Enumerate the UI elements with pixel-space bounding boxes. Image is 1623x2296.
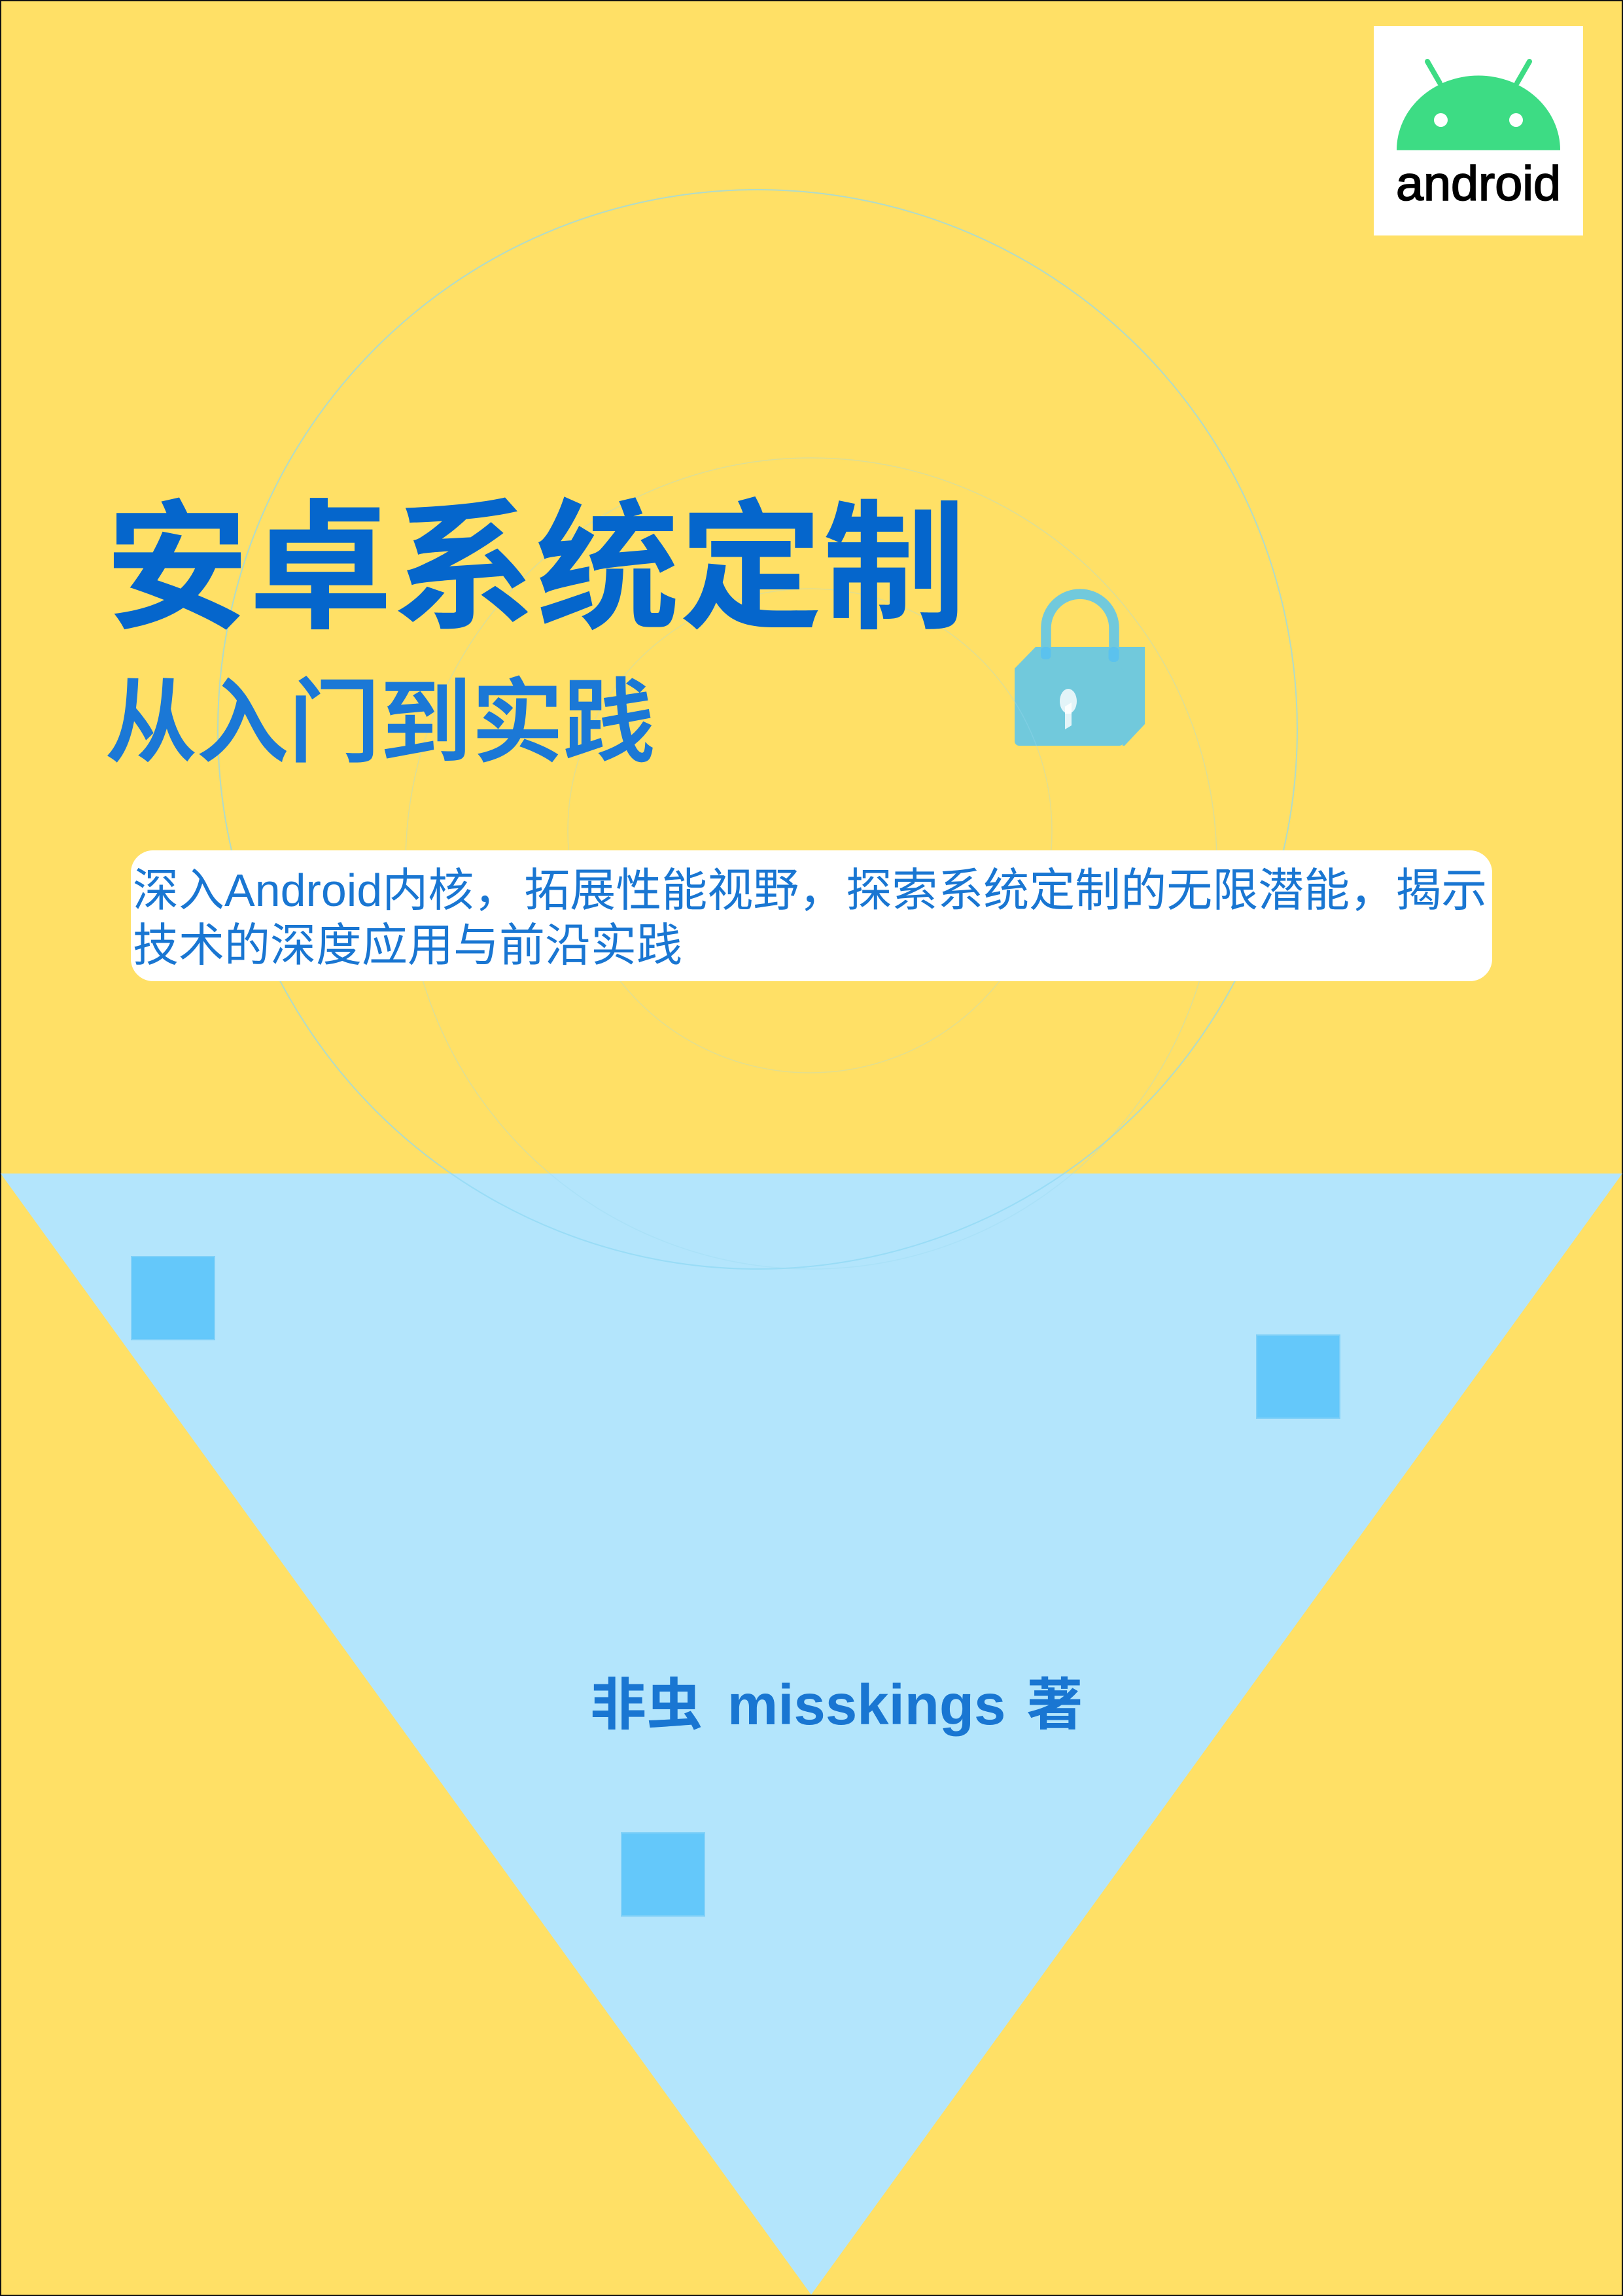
icon: android logo: android	[1396, 156, 1561, 211]
concentric outline circles	[218, 190, 1297, 1269]
description callout	[131, 850, 1492, 981]
description callout: 技术的深度应用与前沿实践	[133, 920, 682, 971]
icon: android logo	[1374, 26, 1583, 235]
decorative squares	[131, 1257, 1340, 1916]
author line: 非虫 misskings 著	[590, 1673, 1083, 1737]
title: 安卓系统定制	[105, 491, 966, 647]
icon: padlock	[1015, 594, 1145, 746]
description callout: 深入Android内核，拓展性能视野，探索系统定制的无限潜能，揭示	[133, 865, 1487, 916]
subtitle: 从入门到实践	[105, 671, 655, 774]
inverted triangle panel	[1, 1174, 1622, 2295]
